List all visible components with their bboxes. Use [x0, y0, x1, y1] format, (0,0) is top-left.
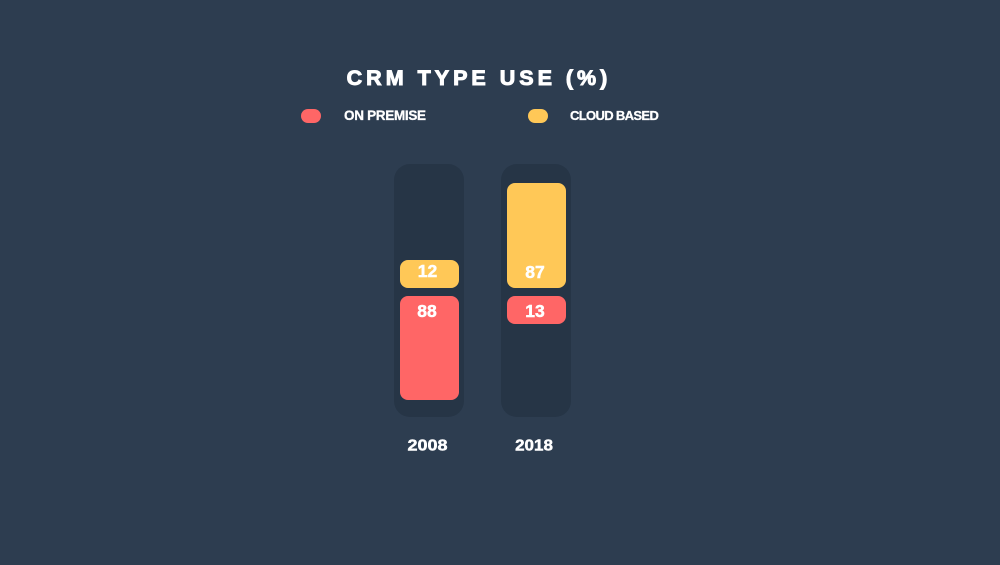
legend label: on premise: ON PREMISE — [344, 108, 426, 123]
value: 13: 13 — [525, 301, 545, 321]
value: 88: 88 — [417, 301, 437, 321]
segment: 2008 cloud based 12 — [400, 260, 458, 288]
year label: 2018: 2018 — [515, 437, 553, 454]
segment: 2018 cloud based 87 — [506, 183, 566, 288]
value: 12: 12 — [418, 261, 437, 281]
bar column: 2008 — [394, 164, 464, 417]
legend swatch: on premise — [301, 109, 321, 123]
segment: 2018 on premise 13 — [506, 296, 566, 324]
bar column: 2018 — [501, 164, 571, 417]
segment: 2008 on premise 88 — [400, 296, 458, 400]
value: 87: 87 — [525, 262, 545, 282]
year label: 2008: 2008 — [407, 436, 448, 454]
legend label: cloud based: CLOUD BASED — [570, 108, 658, 123]
legend swatch: cloud based — [528, 109, 548, 123]
legend — [301, 108, 658, 123]
title: CRM TYPE USE (%) — [347, 66, 611, 90]
